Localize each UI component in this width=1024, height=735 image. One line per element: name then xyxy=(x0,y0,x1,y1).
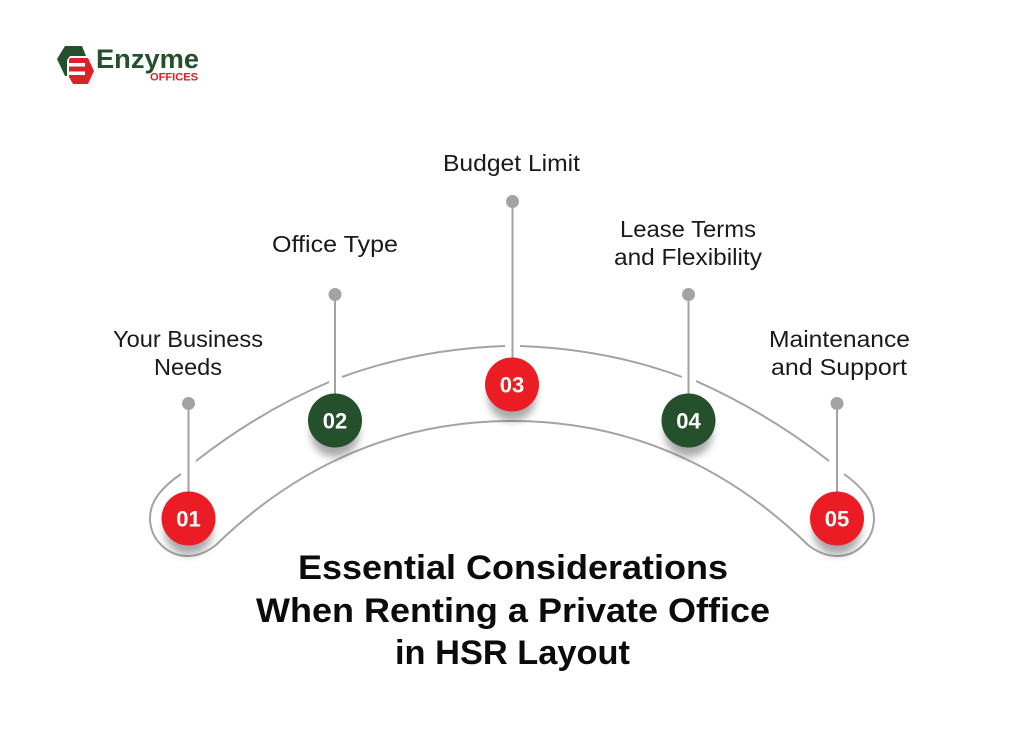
badge 1 xyxy=(162,492,216,555)
title xyxy=(256,549,770,672)
step 2: Office Type xyxy=(272,231,398,457)
label 4: and Flexibility xyxy=(614,244,762,270)
step 5: Maintenance and Support xyxy=(769,326,910,555)
badge 2 xyxy=(308,394,362,457)
connector 4 xyxy=(682,288,695,394)
connector 2 xyxy=(328,288,342,394)
label 1 xyxy=(113,326,263,380)
arc band xyxy=(150,346,874,556)
badge 4: 04 xyxy=(676,408,701,434)
badge 3: 03 xyxy=(500,372,524,398)
connector 5 xyxy=(830,397,844,492)
title: Essential Considerations xyxy=(298,549,728,587)
logo: Enzyme Offices xyxy=(57,44,199,84)
logo: Enzyme Offices: OFFICES xyxy=(150,72,198,84)
badge 3 xyxy=(485,358,539,421)
label 1: Needs xyxy=(154,354,222,380)
step 1: Your Business Needs xyxy=(113,326,263,555)
label 5: and Support xyxy=(771,354,907,380)
label 4: Lease Terms xyxy=(620,216,756,242)
connector 3 xyxy=(506,195,519,358)
label 4 xyxy=(614,216,762,270)
badge 1: 01 xyxy=(176,506,201,532)
badge 4 xyxy=(662,394,716,457)
connector 1 xyxy=(182,397,195,492)
badge 5 xyxy=(810,492,864,555)
step 4: Lease Terms and Flexibility xyxy=(614,216,762,457)
logo: Enzyme Offices: Enzyme xyxy=(96,44,199,74)
title: When Renting a Private Office xyxy=(256,592,770,630)
label 2: Office Type xyxy=(272,231,398,257)
label 1: Your Business xyxy=(113,326,263,352)
badge 2: 02 xyxy=(323,408,347,434)
label 3: Budget Limit xyxy=(443,150,580,176)
title: in HSR Layout xyxy=(395,634,630,672)
label 5: Maintenance xyxy=(769,326,910,352)
label 5 xyxy=(769,326,910,380)
step 3: Budget Limit xyxy=(443,150,580,421)
badge 5: 05 xyxy=(825,506,849,532)
